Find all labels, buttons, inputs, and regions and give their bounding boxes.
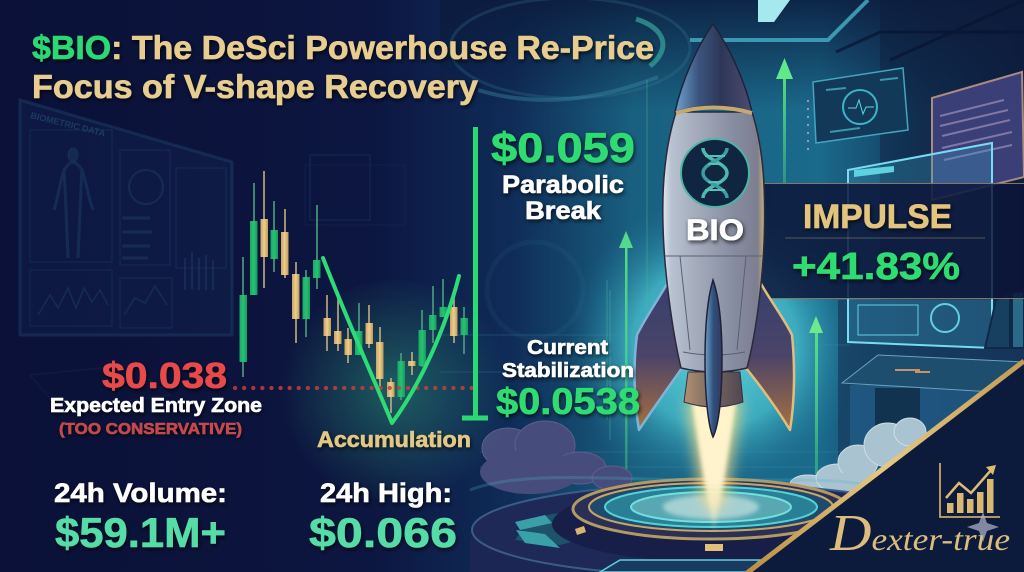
- badge background: [747, 360, 1024, 572]
- label: current stabilization: Stabilization: [502, 360, 634, 382]
- sparkle: [967, 512, 999, 542]
- callout band: [755, 183, 1024, 299]
- stat: 24h volume: 24h Volume:: [54, 478, 227, 508]
- rocket exhaust flame: [686, 400, 742, 532]
- label: parabolic break: [491, 124, 635, 225]
- accumulation glow: [280, 280, 510, 500]
- V-shape recovery line: [323, 258, 459, 423]
- stat: 24h volume: $59.1M+: [55, 509, 226, 556]
- screen: side monitors: [985, 292, 1024, 348]
- label: expected entry zone: (TOO CONSERVATIVE): [59, 421, 242, 438]
- label: parabolic break: Parabolic: [502, 171, 624, 199]
- gold band: [676, 108, 752, 113]
- right fin: [746, 282, 794, 430]
- callout value: +41.83%: [792, 246, 960, 288]
- green arrows background: [619, 58, 823, 490]
- screen: heart monitor: [813, 68, 908, 143]
- green candles: [240, 221, 468, 397]
- console: [842, 355, 1024, 448]
- nose cone: [675, 24, 752, 112]
- clouds: [480, 418, 926, 510]
- corner brand badge: [747, 360, 1024, 572]
- left fin: [635, 282, 682, 430]
- label: parabolic break: Break: [525, 197, 601, 225]
- cloud: right smoke: [790, 418, 926, 510]
- center fin: [705, 280, 722, 437]
- price range bracket: [462, 127, 488, 418]
- rocket label: BIO: [686, 214, 744, 247]
- screen: purple data: [932, 72, 1024, 200]
- cloud: left smoke: [480, 421, 632, 494]
- icon: rising chart logo: [940, 463, 1000, 517]
- arrow: top right: [776, 58, 793, 184]
- rocket body: [663, 112, 765, 372]
- label: expected entry zone: $0.038: [102, 355, 227, 396]
- arrow: lower right: [809, 316, 823, 490]
- title: [32, 29, 654, 105]
- stat: 24h high: [309, 478, 457, 556]
- title line 2: Focus of V-shape Recovery: [32, 68, 479, 105]
- stat: 24h high: 24h High:: [320, 478, 452, 508]
- title line 1: $BIO: The DeSci Powerhouse Re-Price: [32, 29, 654, 66]
- arrow: rocket left: [619, 231, 633, 475]
- impulse callout: [755, 183, 1024, 299]
- rocket: [635, 24, 794, 437]
- brand name: Dexter-true: [829, 505, 1010, 562]
- label: parabolic break: $0.059: [491, 124, 635, 171]
- launch platform: [470, 478, 952, 572]
- label: accumulation: Accumulation: [317, 427, 471, 452]
- candlestick chart: [235, 127, 510, 500]
- callout label: IMPULSE: [803, 198, 952, 236]
- entry level dotted line: [235, 386, 472, 390]
- ceiling light: [690, 0, 1024, 60]
- label: expected entry zone: Expected Entry Zone: [50, 395, 262, 417]
- label: current stabilization: $0.0538: [496, 381, 640, 422]
- screen: glass panel: [848, 143, 992, 348]
- label: current stabilization: [496, 337, 640, 422]
- gold candles: [260, 219, 458, 397]
- faint panel: biometric data: [20, 100, 405, 410]
- label: current stabilization: Current: [527, 337, 608, 359]
- stat: 24h high: $0.066: [309, 509, 457, 556]
- nozzle: [684, 372, 743, 407]
- stat: 24h volume: [54, 478, 227, 556]
- icon: DNA emblem: [681, 139, 749, 207]
- candle wicks: [243, 171, 464, 413]
- faint panel: biometric data: BIOMETRIC DATA: [30, 110, 107, 139]
- label: expected entry zone: [50, 355, 262, 438]
- right screens: [813, 68, 1024, 448]
